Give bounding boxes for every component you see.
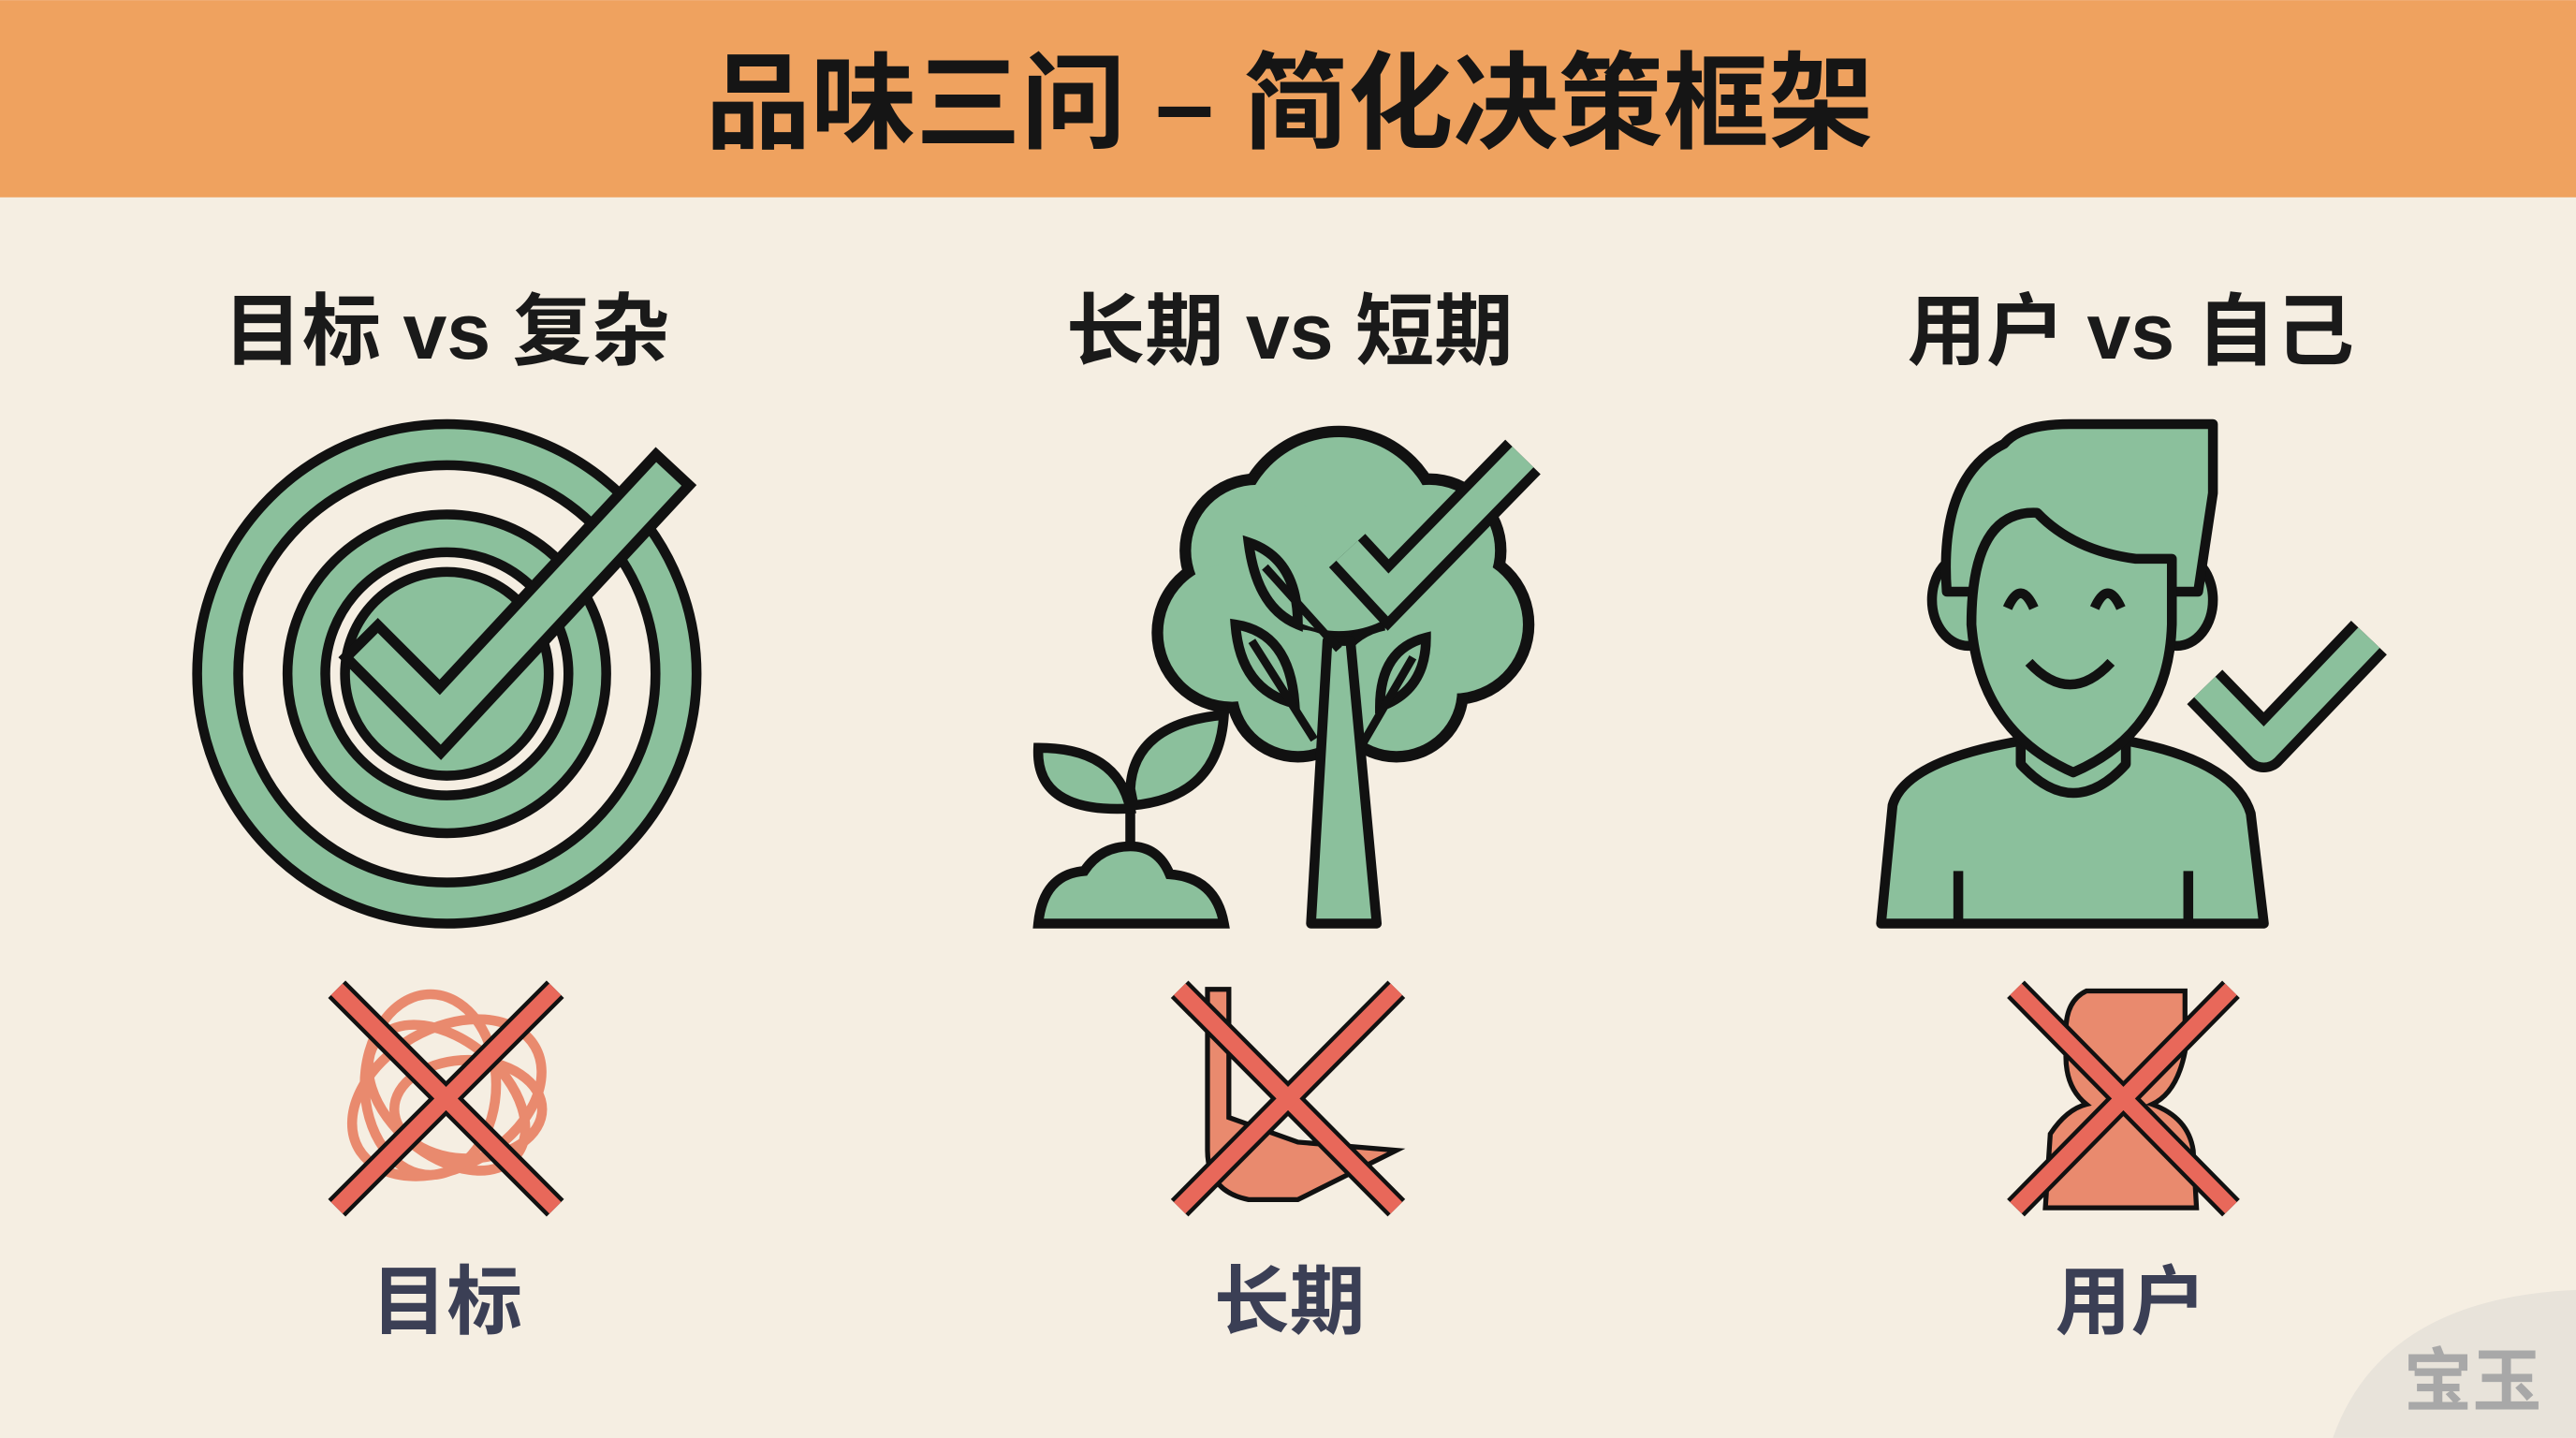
- label: 长期: 长期: [1214, 1260, 1365, 1344]
- icon: crossed-out self: [2016, 990, 2231, 1208]
- label: 目标: 目标: [372, 1260, 522, 1344]
- icon: tree and sprout with check: [1038, 426, 1534, 924]
- title: 品味三问 – 简化决策框架: [706, 44, 1874, 162]
- header band: [0, 0, 2576, 198]
- icon: smiling person with check: [1881, 424, 2369, 924]
- heading: 目标 vs 复杂: 目标 vs 复杂: [224, 287, 670, 375]
- watermark: [2333, 1290, 2576, 1438]
- heading: 用户 vs 自己: 用户 vs 自己: [1908, 287, 2354, 375]
- icon: crossed-out tangle: [324, 987, 569, 1209]
- heading: 长期 vs 短期: 长期 vs 短期: [1066, 287, 1513, 375]
- icon: crossed-out short-term arrow: [1179, 990, 1397, 1208]
- label: 用户: 用户: [2056, 1260, 2206, 1344]
- icon: target with check: [198, 424, 696, 924]
- watermark: 宝玉: [2404, 1343, 2541, 1420]
